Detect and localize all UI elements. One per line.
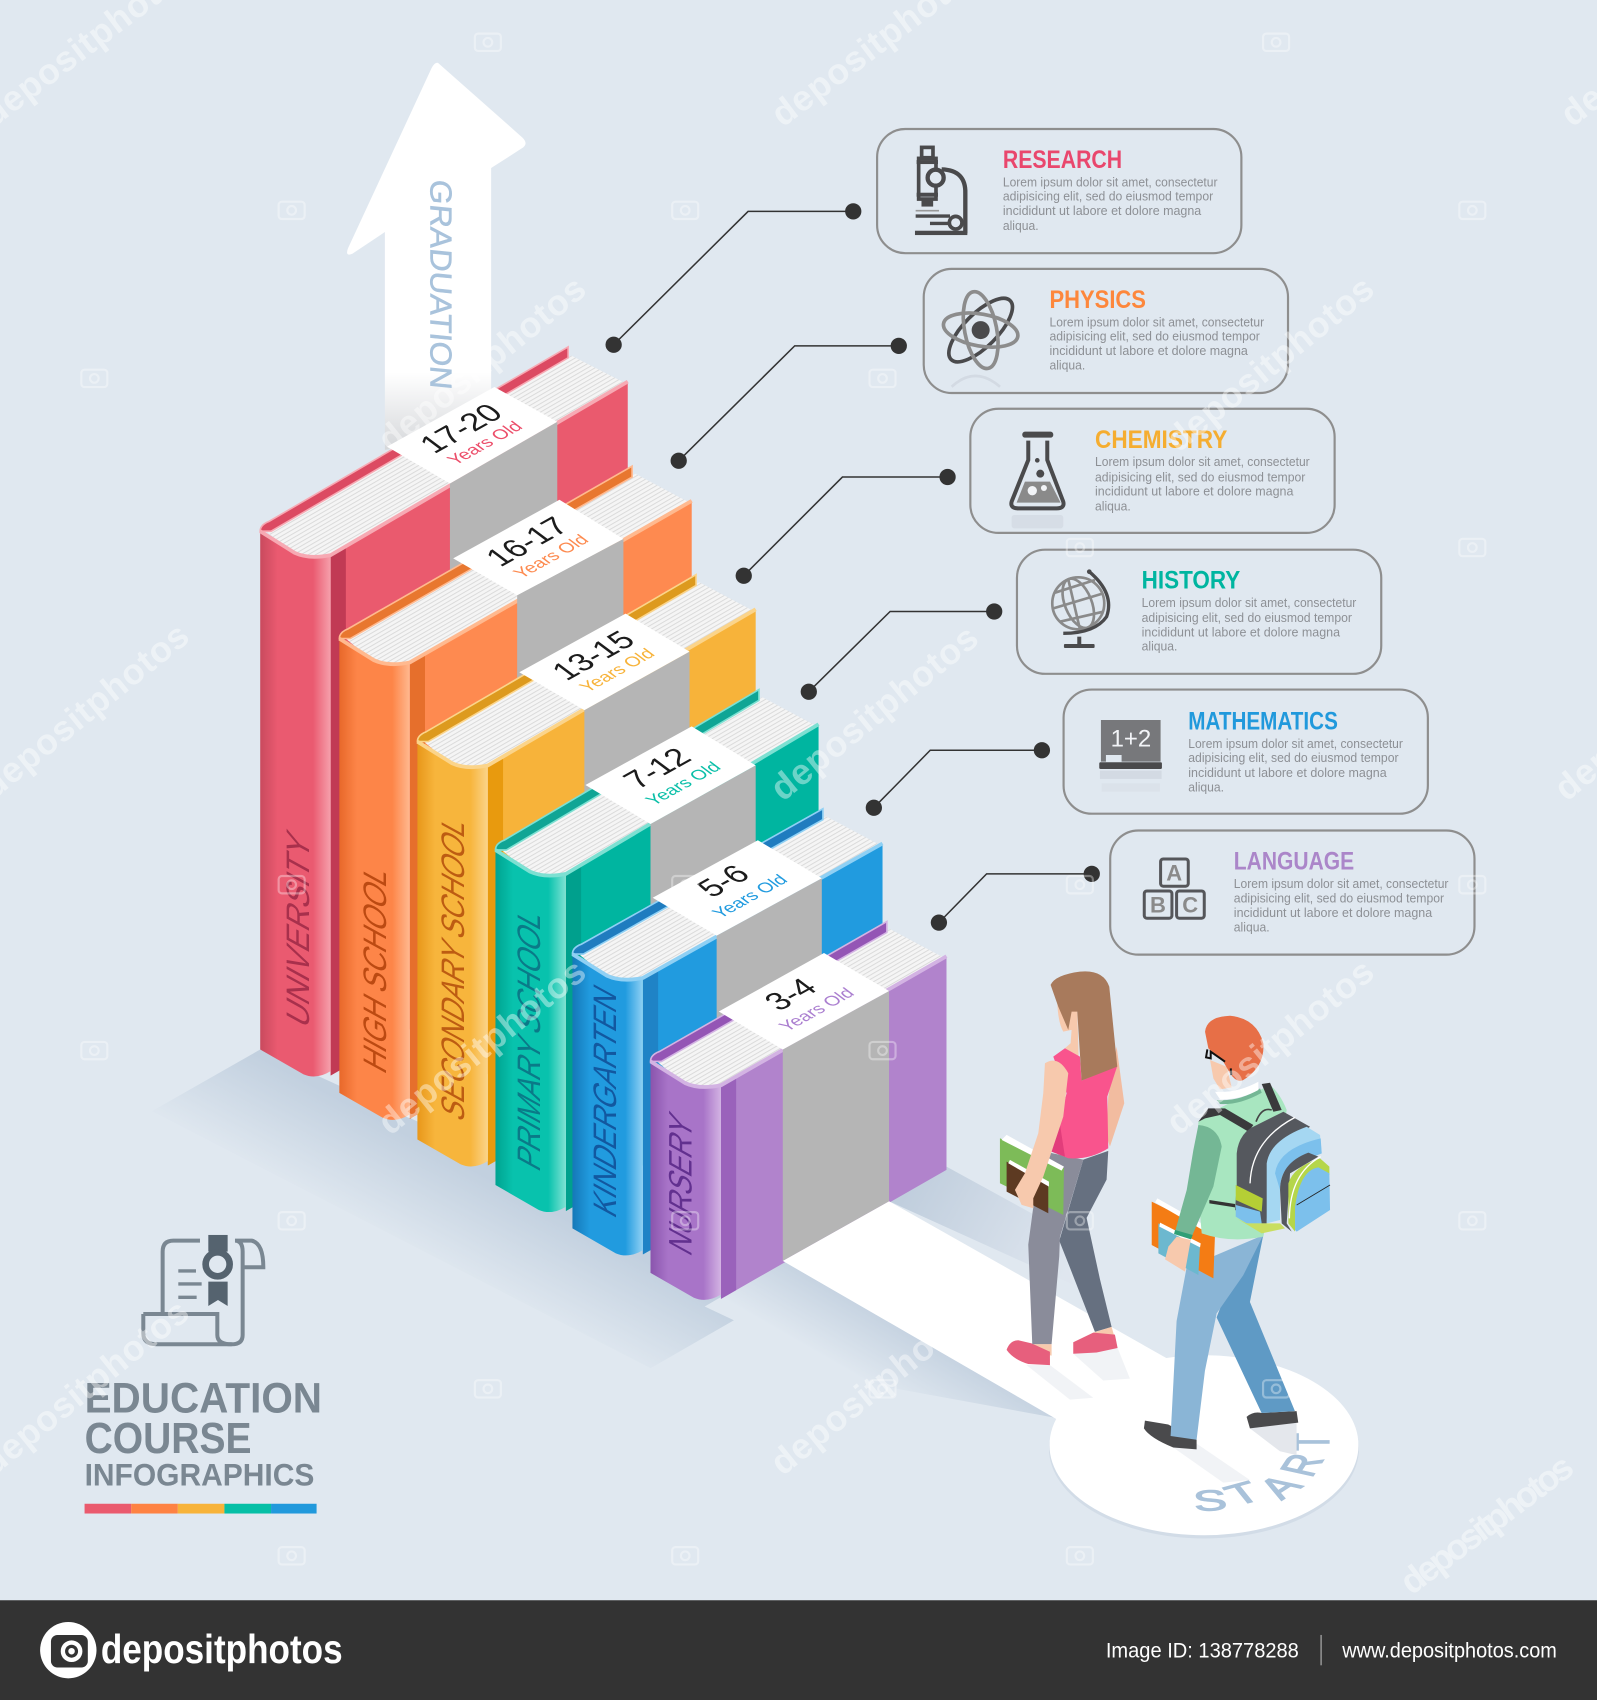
start label [1191, 1433, 1340, 1518]
book: kindergarten: KINDERGARTEN [587, 978, 623, 1224]
icon: microscope [915, 147, 967, 235]
history text: adipisicing elit, sed do eiusmod tempor [1142, 611, 1352, 625]
book: kindergarten [572, 809, 883, 1255]
start label: T [1283, 1433, 1340, 1451]
watermarks: depositphotos [370, 951, 593, 1142]
icon: diploma scroll [143, 1235, 263, 1344]
physics text: aliqua. [1049, 359, 1085, 373]
icon: blackboard [1099, 720, 1162, 792]
language text: adipisicing elit, sed do eiusmod tempor [1234, 892, 1444, 906]
mathematics title: MATHEMATICS [1188, 708, 1338, 736]
age tag: 17-20: 17-20 [412, 398, 510, 458]
age tag: 13-15 [519, 614, 690, 808]
history text [1142, 596, 1356, 654]
watermarks: depositphotos [1392, 1446, 1581, 1602]
history text: aliqua. [1142, 640, 1177, 654]
chemistry title: CHEMISTRY [1095, 426, 1228, 454]
panel: history [1017, 550, 1381, 674]
age tag: 13-15: Years Old [575, 645, 659, 695]
start circle [1049, 1355, 1358, 1535]
age tag: 17-20 [387, 387, 557, 581]
image id: Image ID: 138778288 [1106, 1640, 1299, 1663]
arrow label: GRADUATION [423, 178, 457, 391]
age tag: 5-6: 5-6 [690, 860, 757, 903]
mathematics text: incididunt ut labore et dolore magna [1188, 766, 1387, 780]
panel: mathematics [1064, 690, 1428, 814]
panel: chemistry [970, 409, 1335, 533]
footer divider [1321, 1635, 1322, 1665]
age tag: 3-4: Years Old [774, 985, 859, 1034]
age tag: 3-4 [719, 953, 889, 1261]
book: university: UNIVERSITY [280, 824, 316, 1034]
leader lines [606, 203, 1100, 931]
language text [1234, 877, 1448, 934]
language title: LANGUAGE [1234, 848, 1354, 876]
research text: Lorem ipsum dolor sit amet, consectetur [1003, 175, 1218, 189]
footer logo icon [40, 1622, 96, 1678]
watermarks: depositphotos [370, 268, 593, 459]
icon: alphabet blocks [1144, 859, 1204, 918]
language text: incididunt ut labore et dolore magna [1234, 906, 1432, 920]
book: primary school [495, 690, 819, 1212]
age tag: 7-12 [585, 726, 756, 922]
age tag: 17-20: Years Old [443, 418, 527, 468]
age tag: 16-17 [453, 500, 623, 694]
footer bar [0, 1600, 1597, 1700]
start path [783, 1201, 1359, 1538]
title: COURSE [85, 1415, 252, 1463]
icon: alphabet blocks: B [1150, 892, 1166, 917]
icon: flask [1011, 432, 1064, 528]
book: primary school: PRIMARY SCHOOL [511, 900, 547, 1177]
panel: research [877, 129, 1241, 253]
icon: alphabet blocks: A [1166, 860, 1182, 885]
physics title: PHYSICS [1049, 286, 1146, 314]
watermarks: depositphotos [1158, 268, 1382, 459]
physics text: adipisicing elit, sed do eiusmod tempor [1049, 329, 1260, 343]
age tag: 5-6 [653, 840, 822, 1035]
start label: R [1269, 1449, 1335, 1481]
physics text: Lorem ipsum dolor sit amet, consectetur [1049, 315, 1264, 329]
language text: aliqua. [1234, 920, 1270, 934]
watermarks: depositphotos [1158, 951, 1382, 1142]
website: www.depositphotos.com [1341, 1640, 1557, 1663]
floor shadow [152, 1049, 1073, 1418]
icon: blackboard: 1+2 [1111, 726, 1151, 753]
age tag: 13-15: 13-15 [544, 626, 642, 686]
book: university [260, 347, 628, 1077]
title: EDUCATION [85, 1375, 322, 1422]
watermark cameras [81, 34, 1485, 1564]
footer logo text: depositphotos [101, 1626, 343, 1672]
book: secondary school [417, 575, 756, 1166]
start label: A [1248, 1468, 1313, 1505]
mathematics text [1188, 737, 1403, 794]
icon: alphabet blocks: C [1182, 892, 1198, 917]
research text: aliqua. [1003, 219, 1039, 233]
icon: atom [939, 289, 1022, 387]
icon: globe [1052, 569, 1109, 648]
mathematics text: adipisicing elit, sed do eiusmod tempor [1188, 751, 1399, 765]
watermarks: depositphotos [763, 617, 986, 809]
watermarks: depositphotos [763, 1291, 986, 1483]
age tag: 7-12: 7-12 [616, 743, 699, 794]
research text: incididunt ut labore et dolore magna [1003, 204, 1201, 218]
chemistry text [1095, 455, 1310, 514]
colour bar [85, 1504, 317, 1514]
history title: HISTORY [1142, 567, 1241, 595]
book: nursery [651, 922, 946, 1300]
age tag: 16-17: Years Old [509, 532, 593, 581]
history text: Lorem ipsum dolor sit amet, consectetur [1142, 596, 1356, 610]
start label: S [1191, 1483, 1229, 1518]
age tag: 5-6: Years Old [708, 871, 792, 921]
age tag: 16-17: 16-17 [478, 512, 576, 572]
chemistry text: adipisicing elit, sed do eiusmod tempor [1095, 470, 1305, 484]
book: nursery: NURSERY [663, 1106, 699, 1262]
language text: Lorem ipsum dolor sit amet, consectetur [1234, 877, 1448, 891]
age tag: 3-4: 3-4 [757, 973, 825, 1016]
research text [1003, 175, 1218, 233]
age tag: 7-12: Years Old [641, 759, 725, 808]
boy student [1144, 1016, 1330, 1483]
research title: RESEARCH [1003, 146, 1122, 174]
start label: T [1217, 1475, 1269, 1512]
book: secondary school: SECONDARY SCHOOL [435, 808, 471, 1127]
history text: incididunt ut labore et dolore magna [1142, 625, 1340, 639]
book: high school [339, 466, 692, 1120]
title: INFOGRAPHICS [85, 1457, 314, 1492]
mathematics text: Lorem ipsum dolor sit amet, consectetur [1188, 737, 1403, 751]
panel: language [1110, 830, 1474, 955]
physics text: incididunt ut labore et dolore magna [1049, 344, 1248, 358]
chemistry text: aliqua. [1095, 500, 1131, 514]
chemistry text: Lorem ipsum dolor sit amet, consectetur [1095, 455, 1310, 469]
research text: adipisicing elit, sed do eiusmod tempor [1003, 190, 1213, 204]
title [85, 1375, 322, 1492]
chemistry text: incididunt ut labore et dolore magna [1095, 484, 1293, 498]
mathematics text: aliqua. [1188, 780, 1224, 794]
physics text [1049, 315, 1264, 373]
girl student [1000, 971, 1130, 1400]
book: high school: HIGH SCHOOL [357, 857, 393, 1080]
panel: physics [924, 269, 1288, 393]
graduation arrow [347, 63, 526, 450]
